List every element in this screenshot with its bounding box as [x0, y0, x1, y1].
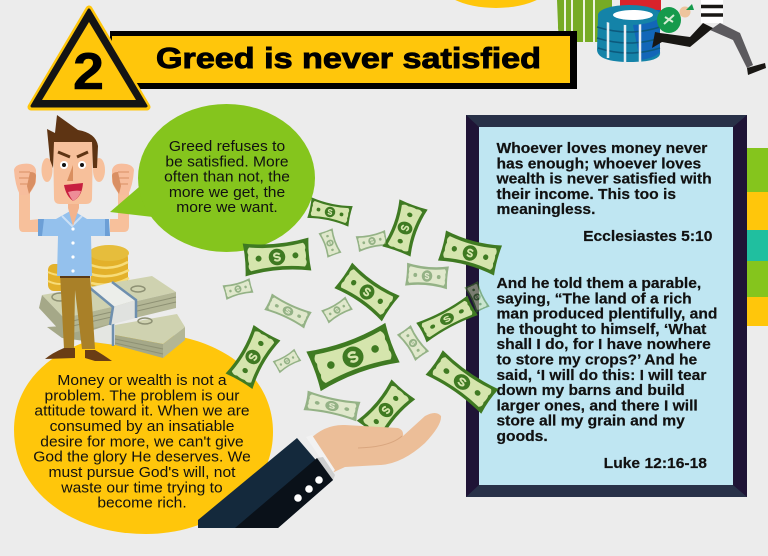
heading: Greed is never satisfied — [156, 43, 541, 75]
verse: Ecclesiastes: Ecclesiastes 5:10 — [583, 228, 712, 245]
callout text: attitude toward it. When we are — [34, 403, 250, 420]
verse: Ecclesiastes: Whoever loves money never — [496, 140, 707, 157]
verse: Luke: Luke 12:16-18 — [604, 455, 707, 472]
bubble text: Greed refuses to — [169, 138, 285, 155]
callout text: become rich. — [97, 495, 187, 512]
nose — [67, 165, 73, 181]
illustration: open hand with suit sleeve — [198, 413, 441, 528]
icon: running burglar — [652, 0, 766, 75]
shoes — [45, 348, 75, 359]
callout text: problem. The problem is our — [45, 388, 239, 404]
callout: yellow circle — [14, 333, 273, 534]
verse: Luke: he thought to himself, ‘What — [496, 321, 706, 338]
callout text: desire for more, we can't give — [40, 434, 244, 450]
verse: Luke: shall I do, for I have nowhere — [496, 337, 711, 353]
verse: Ecclesiastes: has enough; whoever loves — [496, 156, 701, 172]
speech bubble: green — [110, 104, 315, 252]
verse: Ecclesiastes: their income. This too is — [496, 186, 676, 203]
top yellow callout fragment — [436, 0, 556, 8]
title banner — [110, 31, 577, 89]
shirt — [38, 210, 110, 276]
face — [53, 142, 93, 204]
hair — [47, 115, 98, 168]
verse: Luke: larger ones, and there I will — [496, 398, 698, 414]
mouth — [64, 183, 83, 201]
ears — [42, 158, 52, 182]
lower stack — [47, 314, 185, 358]
illustration: cheering man — [14, 115, 134, 361]
right edge colour bars — [747, 148, 768, 326]
callout text: consumed by an insatiable — [50, 418, 234, 435]
trousers — [60, 273, 95, 349]
verse: Luke: man produced plentifully, and — [496, 306, 717, 322]
callout text: must pursue God's will, not — [49, 464, 236, 481]
neck — [68, 200, 79, 226]
verse: Ecclesiastes: meaningless. — [496, 202, 595, 218]
illustration: stacks of banknotes — [39, 276, 185, 358]
bubble text: often than not, the — [164, 169, 290, 185]
verse: Luke: store all my grain and my — [496, 413, 685, 430]
warning triangle with number 2 — [31, 9, 147, 107]
verse: Luke: goods. — [496, 428, 548, 445]
warning triangle with number 2: 2 — [73, 43, 104, 101]
scripture panel — [466, 115, 747, 497]
verse: Luke: down my barns and build — [496, 383, 685, 399]
verse: Luke: saying, “The land of a rich — [496, 291, 692, 307]
falling banknotes — [223, 197, 502, 441]
callout text: Money or wealth is not a — [57, 372, 227, 389]
eyes — [60, 161, 68, 169]
icon: casino chips — [557, 0, 661, 62]
upper stack — [39, 276, 176, 335]
callout text: waste our time trying to — [60, 480, 223, 496]
verse: Luke: to store my crops?’ And he — [496, 352, 697, 368]
callout text: God the glory He deserves. We — [33, 449, 251, 466]
bubble text: be satisfied. More — [165, 154, 289, 170]
bubble text: more we get, the — [169, 184, 285, 201]
illustration: coins — [48, 245, 129, 292]
verse: Luke: And he told them a parable, — [496, 275, 701, 292]
verse: Ecclesiastes: wealth is never satisfied with — [495, 171, 712, 187]
bubble text: more we want. — [176, 200, 278, 216]
verse: Luke: said, ‘I will do this: I will tear — [496, 367, 707, 384]
arms — [19, 192, 42, 232]
left fist — [14, 164, 36, 195]
right fist — [112, 164, 134, 195]
